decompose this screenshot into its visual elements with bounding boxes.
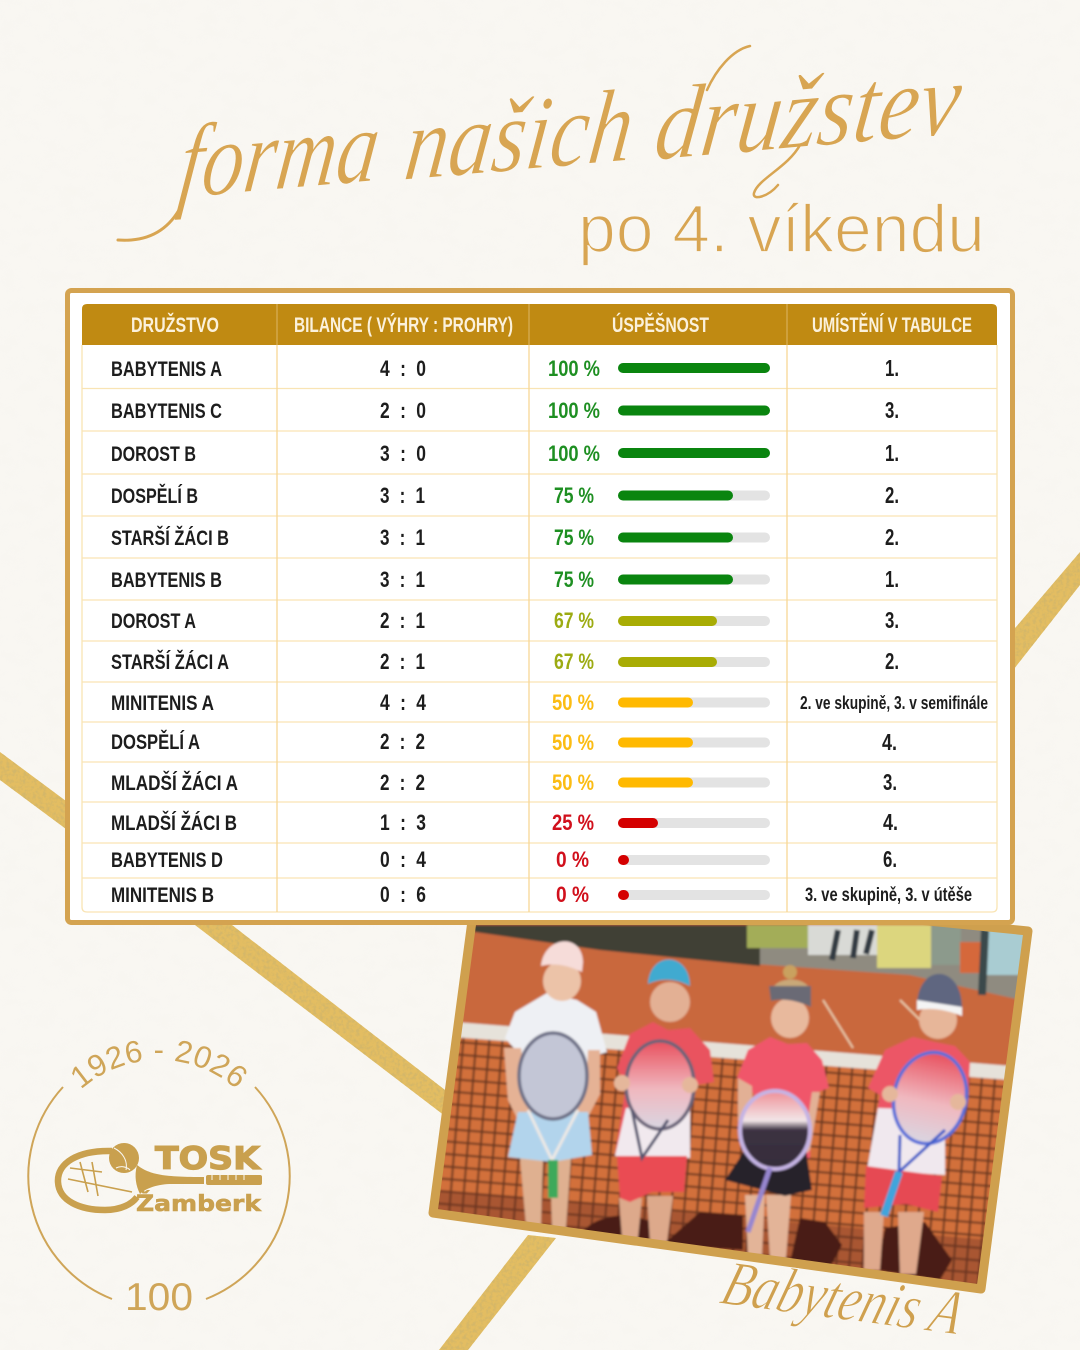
row: Minitenis B: 0 : 6 <box>380 882 426 907</box>
row: Babytenis D: BABYTENIS D <box>111 849 223 872</box>
table panel <box>68 290 1012 922</box>
title word: našich: našich <box>399 66 641 203</box>
table header: BILANCE ( VÝHRY : PROHRY) <box>294 313 513 337</box>
row: Starší žáci A: STARŠÍ ŽÁCI A <box>111 650 229 674</box>
icon: TOSK racket logo: TOSK <box>155 1141 261 1177</box>
row: Minitenis B: MINITENIS B <box>111 884 214 907</box>
row: Dospělí B <box>111 482 899 508</box>
badge number: 100 <box>125 1276 193 1319</box>
row: Dospělí B: 75 % <box>554 483 594 508</box>
row: Dospělí B: 3 : 1 <box>380 483 425 508</box>
row: Dospělí A: 4. <box>882 729 897 755</box>
photo: child 4 <box>864 974 975 1274</box>
row: Mladší žáci A: 50 % <box>552 770 594 795</box>
row: Minitenis B: 0 % <box>556 882 589 907</box>
row: Babytenis D <box>111 846 897 872</box>
photo: net <box>425 1022 1012 1295</box>
row: Minitenis A: 4 : 4 <box>380 690 427 715</box>
row: Dospělí A: 50 % <box>552 730 594 755</box>
photo: child 2 <box>614 959 714 1242</box>
row: Mladší žáci A <box>111 769 897 795</box>
row: Dospělí A <box>111 729 897 755</box>
row: Babytenis A: BABYTENIS A <box>111 358 222 381</box>
row: Starší žáci A <box>111 648 899 674</box>
row: Babytenis D: 6. <box>883 846 897 872</box>
row: Dorost A <box>111 607 899 633</box>
row: Babytenis D: 0 : 4 <box>380 847 427 872</box>
row: Babytenis A <box>111 355 899 381</box>
row: Babytenis A: 100 % <box>548 356 600 381</box>
row: Babytenis B: 1. <box>885 566 899 592</box>
row: Dospělí B: DOSPĚLÍ B <box>111 484 198 508</box>
row: Babytenis B: BABYTENIS B <box>111 569 222 592</box>
row: Starší žáci B: 3 : 1 <box>380 525 425 550</box>
row: Minitenis A: 2. ve skupině, 3. v semifinále <box>800 693 988 713</box>
icon: TOSK racket logo: Žamberk <box>136 1191 263 1217</box>
anniversary badge <box>27 1040 291 1319</box>
row: Babytenis C: 2 : 0 <box>380 398 426 423</box>
row: Mladší žáci B: 4. <box>883 809 898 835</box>
photo: child 3 <box>725 965 829 1258</box>
row: Dorost A: DOROST A <box>111 610 196 633</box>
table header <box>82 304 997 345</box>
row: Starší žáci A: 67 % <box>554 649 594 674</box>
row: Starší žáci B: 75 % <box>554 525 594 550</box>
row: Dorost B <box>111 440 899 466</box>
row: Babytenis A: 1. <box>885 355 899 381</box>
photo: Babytenis A team <box>428 924 1032 1294</box>
table header: UMÍSTĚNÍ V TABULCE <box>812 313 972 337</box>
row: Mladší žáci A: 2 : 2 <box>380 770 425 795</box>
row: Dorost B: 100 % <box>548 441 600 466</box>
row: Dospělí A: DOSPĚLÍ A <box>111 730 200 754</box>
row: Mladší žáci B: 25 % <box>552 810 594 835</box>
row: Dospělí B: 2. <box>885 482 899 508</box>
row: Dorost A: 67 % <box>554 608 594 633</box>
title flourishes <box>118 46 800 240</box>
row: Babytenis C: BABYTENIS C <box>111 400 222 423</box>
row: Dospělí A: 2 : 2 <box>380 729 425 754</box>
row: Babytenis C <box>111 397 899 423</box>
row: Dorost B: 1. <box>885 440 899 466</box>
subtitle: po 4. víkendu <box>578 191 985 267</box>
row: Minitenis B: 3. ve skupině, 3. v útěše <box>805 885 972 906</box>
row: Mladší žáci B: MLADŠÍ ŽÁCI B <box>111 811 237 835</box>
row: Minitenis A <box>111 690 988 715</box>
row: Babytenis A: 4 : 0 <box>380 356 426 381</box>
row: Mladší žáci A: 3. <box>883 769 897 795</box>
row: Mladší žáci B <box>111 809 898 835</box>
icon: TOSK racket logo <box>58 1141 263 1217</box>
row: Dorost A: 3. <box>885 607 899 633</box>
row: Starší žáci A: 2. <box>885 648 899 674</box>
photo background: clay court <box>462 925 1023 1067</box>
row: Starší žáci B: 2. <box>885 524 899 550</box>
gold diagonal ribbons <box>0 552 1080 1350</box>
badge ring <box>28 1087 290 1299</box>
row: Babytenis B <box>111 566 899 592</box>
title word: družstev: družstev <box>649 39 969 183</box>
table header: DRUŽSTVO <box>131 313 219 337</box>
row: Starší žáci B: STARŠÍ ŽÁCI B <box>111 526 229 550</box>
badge years: 1926 - 2026 <box>72 1040 246 1088</box>
row: Minitenis B <box>111 882 972 907</box>
title word: forma: forma <box>173 86 387 221</box>
row: Babytenis B: 3 : 1 <box>380 567 425 592</box>
row: Minitenis A: 50 % <box>552 690 594 715</box>
row: Dorost B: 3 : 0 <box>380 441 426 466</box>
photo: child 1 <box>504 941 607 1228</box>
row: Starší žáci A: 2 : 1 <box>380 649 425 674</box>
row: Babytenis B: 75 % <box>554 567 594 592</box>
row: Babytenis C: 100 % <box>548 398 600 423</box>
row: Starší žáci B <box>111 524 899 550</box>
row: Dorost A: 2 : 1 <box>380 608 425 633</box>
title script <box>118 39 969 240</box>
row: Dorost B: DOROST B <box>111 443 196 466</box>
row: Mladší žáci B: 1 : 3 <box>380 810 426 835</box>
table header: ÚSPĚŠNOST <box>612 313 709 337</box>
row: Babytenis C: 3. <box>885 397 899 423</box>
row: Babytenis D: 0 % <box>556 847 589 872</box>
row: Mladší žáci A: MLADŠÍ ŽÁCI A <box>111 771 238 795</box>
row: Minitenis A: MINITENIS A <box>111 692 214 715</box>
